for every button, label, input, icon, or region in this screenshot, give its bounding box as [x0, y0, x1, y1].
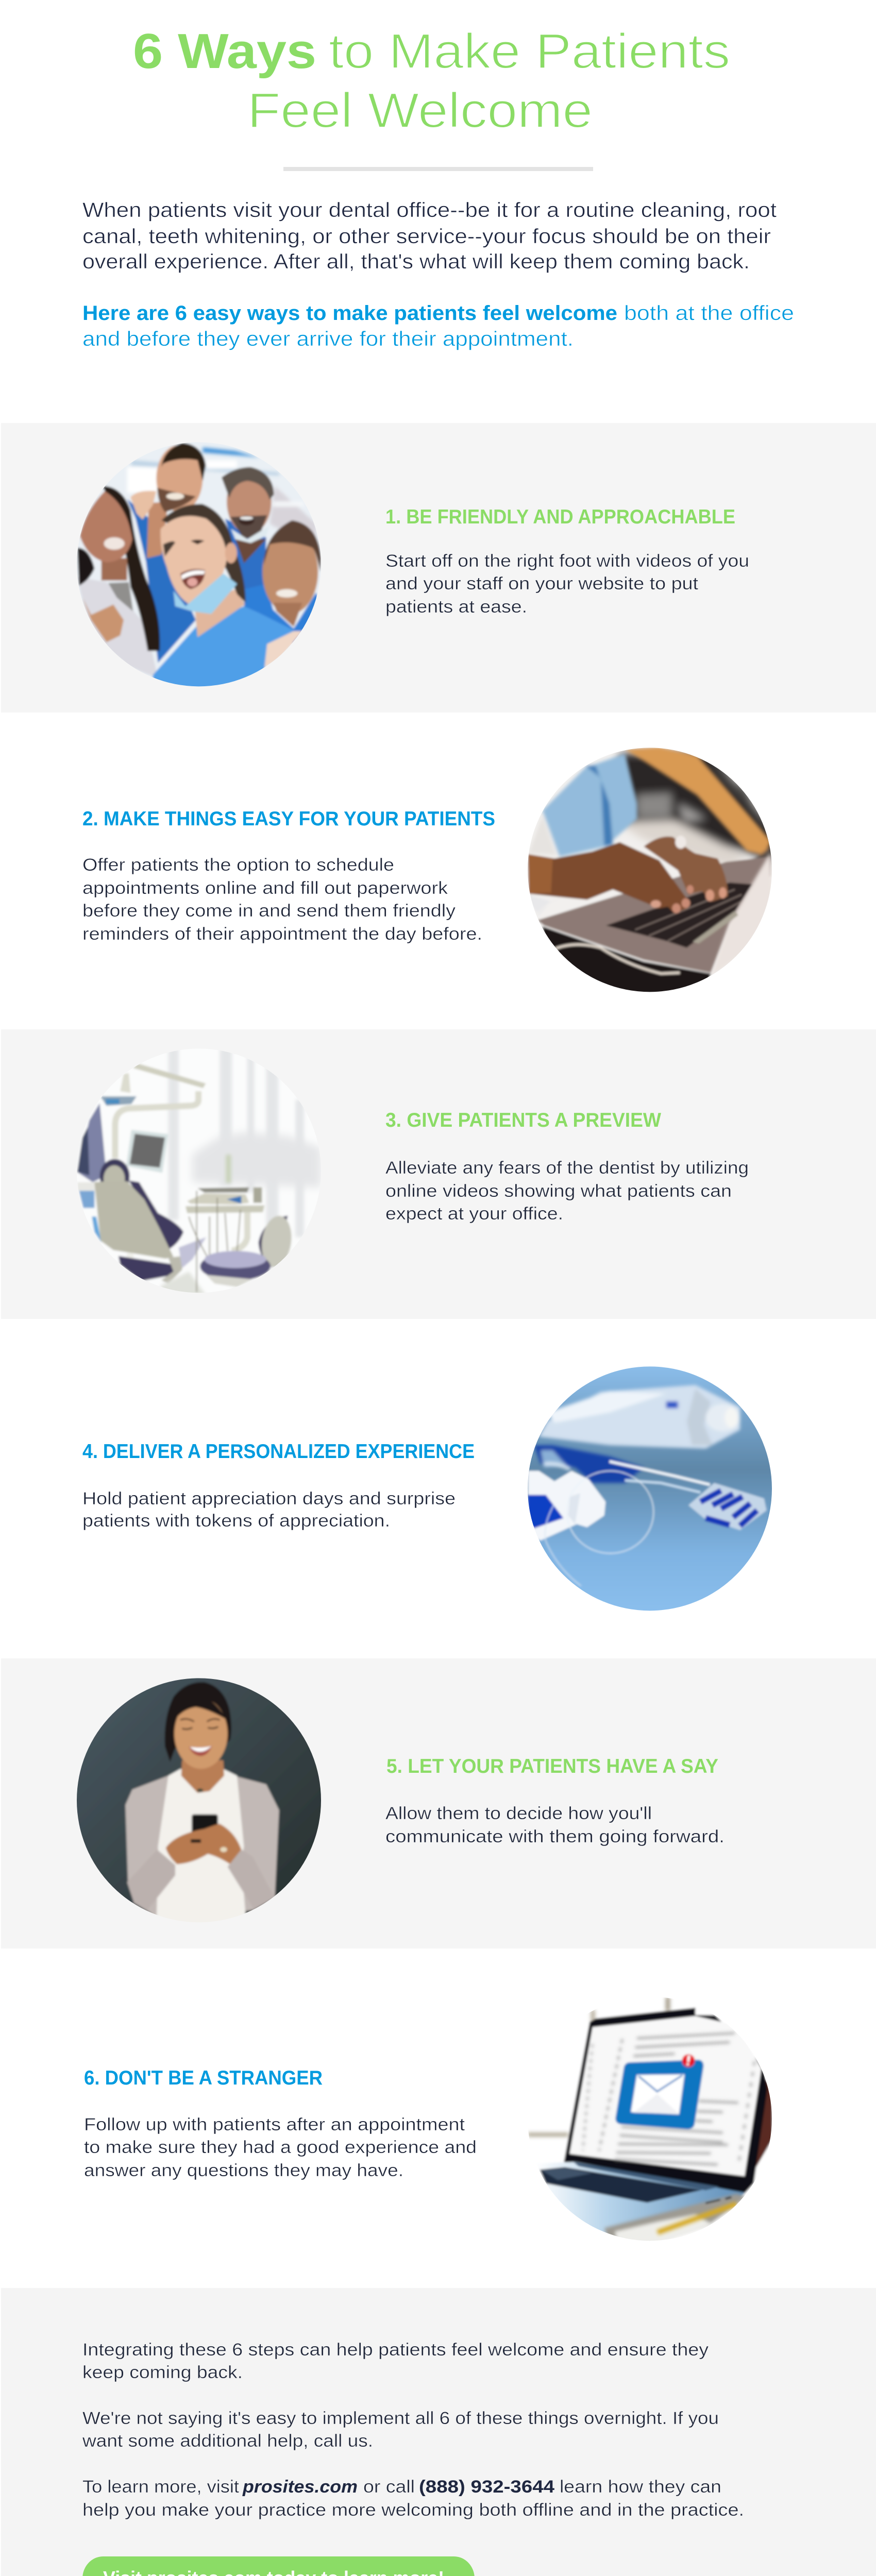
body text: before they come in and send them friendly: [82, 901, 456, 921]
photo: dental exam chair: [72, 1045, 326, 1299]
photo: smiling dental team: [72, 438, 326, 692]
body text: patients with tokens of appreciation.: [82, 1511, 390, 1531]
heading: 2. MAKE THINGS EASY FOR YOUR PATIENTS: [82, 808, 495, 830]
heading: 5. LET YOUR PATIENTS HAVE A SAY: [386, 1755, 718, 1777]
body text: Offer patients the option to schedule: [82, 855, 394, 875]
closing paragraph 3 with contact details: or call: [363, 2477, 415, 2497]
body text: patients at ease.: [385, 597, 527, 617]
closing paragraph 3 with contact details: learn how they can: [560, 2477, 721, 2497]
body text: Alleviate any fears of the dentist by utilizing: [385, 1158, 749, 1178]
heading: 4. DELIVER A PERSONALIZED EXPERIENCE: [82, 1440, 475, 1463]
panel: step 4: [82, 1363, 778, 1617]
body text: answer any questions they may have.: [84, 2161, 403, 2180]
panel: step 3: [1, 1029, 876, 1319]
body text: Hold patient appreciation days and surprise: [82, 1489, 456, 1509]
title: [133, 24, 730, 138]
body text: [385, 551, 749, 617]
title: to Make Patients: [329, 24, 730, 79]
panel: step 1: [1, 423, 876, 713]
body text: reminders of their appointment the day before.: [82, 924, 482, 944]
highlighted intro callout: [82, 302, 794, 350]
intro paragraph: [82, 199, 777, 273]
call to action button: [82, 2556, 475, 2576]
panel: step 2: [82, 743, 778, 997]
panel: closing message: [1, 2288, 876, 2576]
heading: 3. GIVE PATIENTS A PREVIEW: [385, 1109, 661, 1131]
body text: [385, 1804, 725, 1846]
panel: step 5: [1, 1658, 876, 1948]
closing paragraph 3 with contact details: help you make your practice more welcoming both offline and in the practice.: [82, 2500, 744, 2520]
panel: step 6: [84, 1993, 778, 2247]
closing paragraph 3 with contact details: [82, 2477, 744, 2520]
closing paragraph 1: Integrating these 6 steps can help patients feel welcome and ensure they: [82, 2340, 709, 2360]
body text: expect at your office.: [385, 1204, 563, 1224]
intro paragraph: overall experience. After all, that's what will keep them coming back.: [82, 250, 750, 273]
intro paragraph: canal, teeth whitening, or other service--your focus should be on their: [82, 225, 771, 248]
body text: Allow them to decide how you'll: [385, 1804, 652, 1823]
body text: [82, 1489, 456, 1531]
body text: appointments online and fill out paperwork: [82, 878, 448, 898]
body text: Start off on the right foot with videos of you: [385, 551, 749, 571]
closing paragraph 3 with contact details: (888) 932-3644: [419, 2477, 554, 2497]
closing paragraph 3 with contact details: To learn more, visit: [82, 2477, 240, 2497]
photo: laptop with email notification: [524, 1993, 778, 2247]
heading: 6. DON'T BE A STRANGER: [84, 2067, 323, 2089]
closing paragraph 1: [82, 2340, 709, 2382]
body text: and your staff on your website to put: [385, 574, 699, 594]
closing paragraph 3 with contact details: prosites.com: [242, 2477, 358, 2497]
body text: Follow up with patients after an appointment: [84, 2115, 465, 2134]
body text: communicate with them going forward.: [385, 1827, 725, 1846]
closing paragraph 2: We're not saying it's easy to implement all 6 of these things overnight. If you: [82, 2409, 719, 2428]
photo: hands typing on laptop: [524, 743, 778, 997]
intro paragraph: When patients visit your dental office--be it for a routine cleaning, root: [82, 199, 777, 222]
heading: 1. BE FRIENDLY AND APPROACHABLE: [385, 506, 735, 528]
body text: online videos showing what patients can: [385, 1181, 732, 1201]
closing paragraph 2: want some additional help, call us.: [82, 2431, 373, 2451]
closing paragraph 1: keep coming back.: [82, 2363, 243, 2382]
highlighted intro callout: Here are 6 easy ways to make patients feel welcome: [82, 302, 617, 325]
body text: [84, 2115, 477, 2180]
highlighted intro callout: both at the office: [624, 302, 794, 325]
body text: [82, 855, 482, 944]
body text: [385, 1158, 749, 1224]
title: Feel Welcome: [247, 83, 593, 138]
highlighted intro callout: and before they ever arrive for their appointment.: [82, 328, 574, 350]
title: 6 Ways: [133, 24, 316, 79]
body text: to make sure they had a good experience and: [84, 2138, 477, 2157]
closing paragraph 2: [82, 2409, 719, 2451]
photo: toothpaste, toothbrush and floss: [524, 1363, 778, 1617]
photo: woman smiling at phone: [72, 1674, 326, 1928]
